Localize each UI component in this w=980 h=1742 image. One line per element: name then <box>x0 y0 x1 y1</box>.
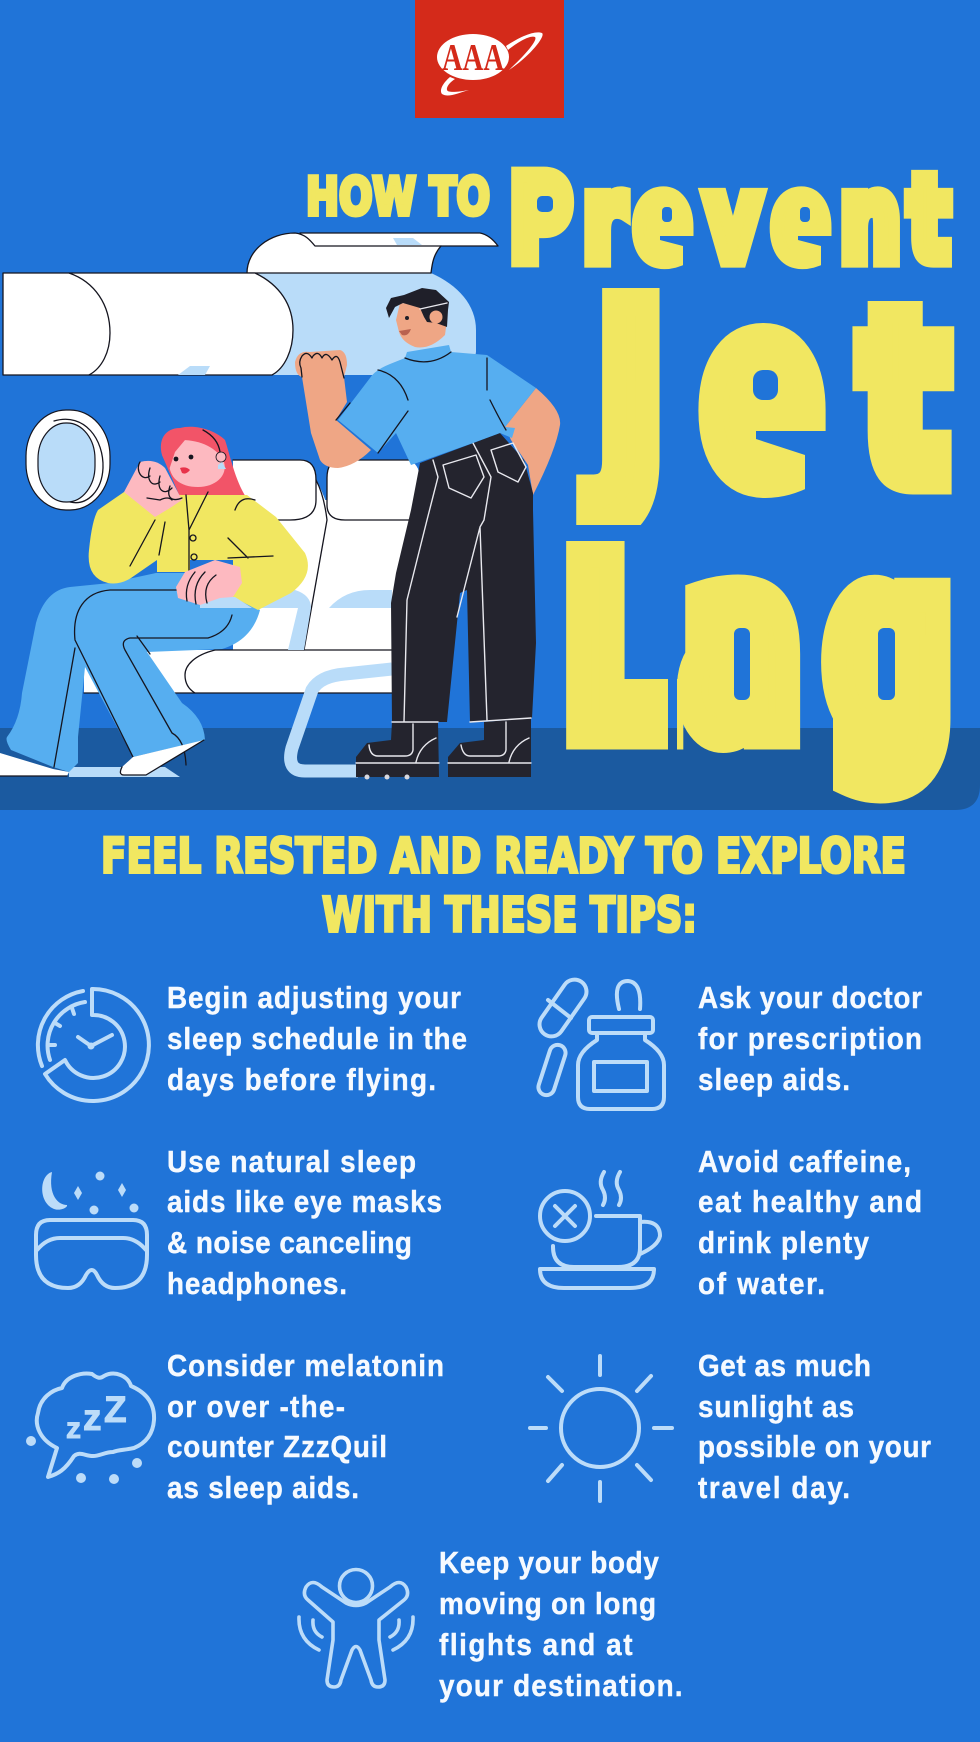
icon: sun <box>530 1356 672 1501</box>
text: headphones. <box>167 1267 347 1301</box>
text: sleep aids. <box>698 1063 850 1097</box>
woman: trousers <box>6 573 260 772</box>
text: counter ZzzQuil <box>167 1430 387 1464</box>
icon: speech bubble with zzz: z <box>83 1397 102 1438</box>
airplane window <box>26 410 110 510</box>
woman: jacket <box>89 492 308 610</box>
text: drink plenty <box>698 1226 870 1260</box>
woman: shoes <box>0 740 204 776</box>
overhead bin opening (light blue) <box>255 273 476 375</box>
man: head <box>386 288 449 348</box>
tip: sunlight <box>530 1349 931 1505</box>
text <box>439 1546 683 1703</box>
tip: avoid caffeine <box>540 1145 922 1301</box>
subheading <box>101 828 906 944</box>
tip: natural sleep aids <box>36 1145 442 1301</box>
text: for prescription <box>698 1022 922 1056</box>
icon: speech bubble with zzz: Z <box>104 1389 127 1430</box>
icon: speech bubble with zzz: z <box>66 1412 81 1445</box>
woman: head <box>162 430 226 487</box>
text: sunlight as <box>698 1390 854 1424</box>
title: how to: HOW TO <box>306 168 490 228</box>
title: lag: Lag <box>562 502 953 792</box>
seats <box>84 460 420 693</box>
text: & noise canceling <box>167 1226 412 1260</box>
text <box>167 1349 444 1505</box>
text <box>698 1349 931 1505</box>
tip: melatonin or ZzzQuil <box>26 1349 444 1505</box>
man: right arm <box>505 388 560 495</box>
text: as sleep aids. <box>167 1471 359 1505</box>
icon: clock <box>38 989 149 1101</box>
title: jet: Jet <box>588 251 946 536</box>
text: Ask your doctor <box>698 981 922 1015</box>
tip: prescription sleep aids <box>535 975 922 1109</box>
armrests <box>329 590 392 608</box>
tip: adjust sleep schedule <box>38 981 467 1101</box>
illustration: airplane cabin with two travelers <box>0 233 560 780</box>
floor band <box>0 728 980 810</box>
text <box>167 1145 442 1301</box>
overhead bin door (open) <box>247 233 498 273</box>
logo: AAA red badge: AAA <box>442 37 504 79</box>
text: aids like eye masks <box>167 1185 442 1219</box>
icon: sleep mask with moon <box>36 1172 147 1288</box>
overhead bin closed <box>3 273 293 375</box>
text: Consider melatonin <box>167 1349 444 1383</box>
text: flights and at <box>439 1628 633 1662</box>
tip: keep moving <box>299 1546 683 1703</box>
icon: coffee cup with x <box>540 1172 660 1288</box>
logo: AAA red badge <box>415 0 564 118</box>
man: shirt <box>336 345 536 465</box>
icon: pills and bottle <box>535 975 664 1109</box>
text <box>698 981 922 1097</box>
text: Begin adjusting your <box>167 981 462 1015</box>
text: Get as much <box>698 1349 871 1383</box>
man: pants <box>391 433 536 722</box>
title <box>306 152 953 792</box>
text: eat healthy and <box>698 1185 922 1219</box>
title: prevent: Prevent <box>509 152 949 287</box>
man: boots <box>356 718 531 780</box>
woman: hair <box>161 427 246 497</box>
traveler: standing man <box>295 288 560 780</box>
text: possible on your <box>698 1430 931 1464</box>
icon: speech bubble with zzz <box>26 1374 154 1484</box>
text: Avoid caffeine, <box>698 1145 911 1179</box>
text: days before flying. <box>167 1063 436 1097</box>
woman: hand on knee <box>176 560 252 608</box>
seat frame <box>69 669 392 777</box>
woman: raised fist <box>124 461 182 517</box>
text: your destination. <box>439 1669 683 1703</box>
text: Use natural sleep <box>167 1145 416 1179</box>
subheading: WITH THESE TIPS: <box>322 888 697 944</box>
text: Keep your body <box>439 1546 660 1580</box>
text <box>167 981 467 1097</box>
text <box>698 1145 922 1301</box>
text: or over -the- <box>167 1390 345 1424</box>
text: sleep schedule in the <box>167 1022 467 1056</box>
text: moving on long <box>439 1587 656 1621</box>
text: of water. <box>698 1267 825 1301</box>
man: left arm <box>295 350 371 468</box>
text: travel day. <box>698 1471 850 1505</box>
icon: stretching person <box>299 1570 413 1687</box>
traveler: seated woman <box>0 427 308 776</box>
